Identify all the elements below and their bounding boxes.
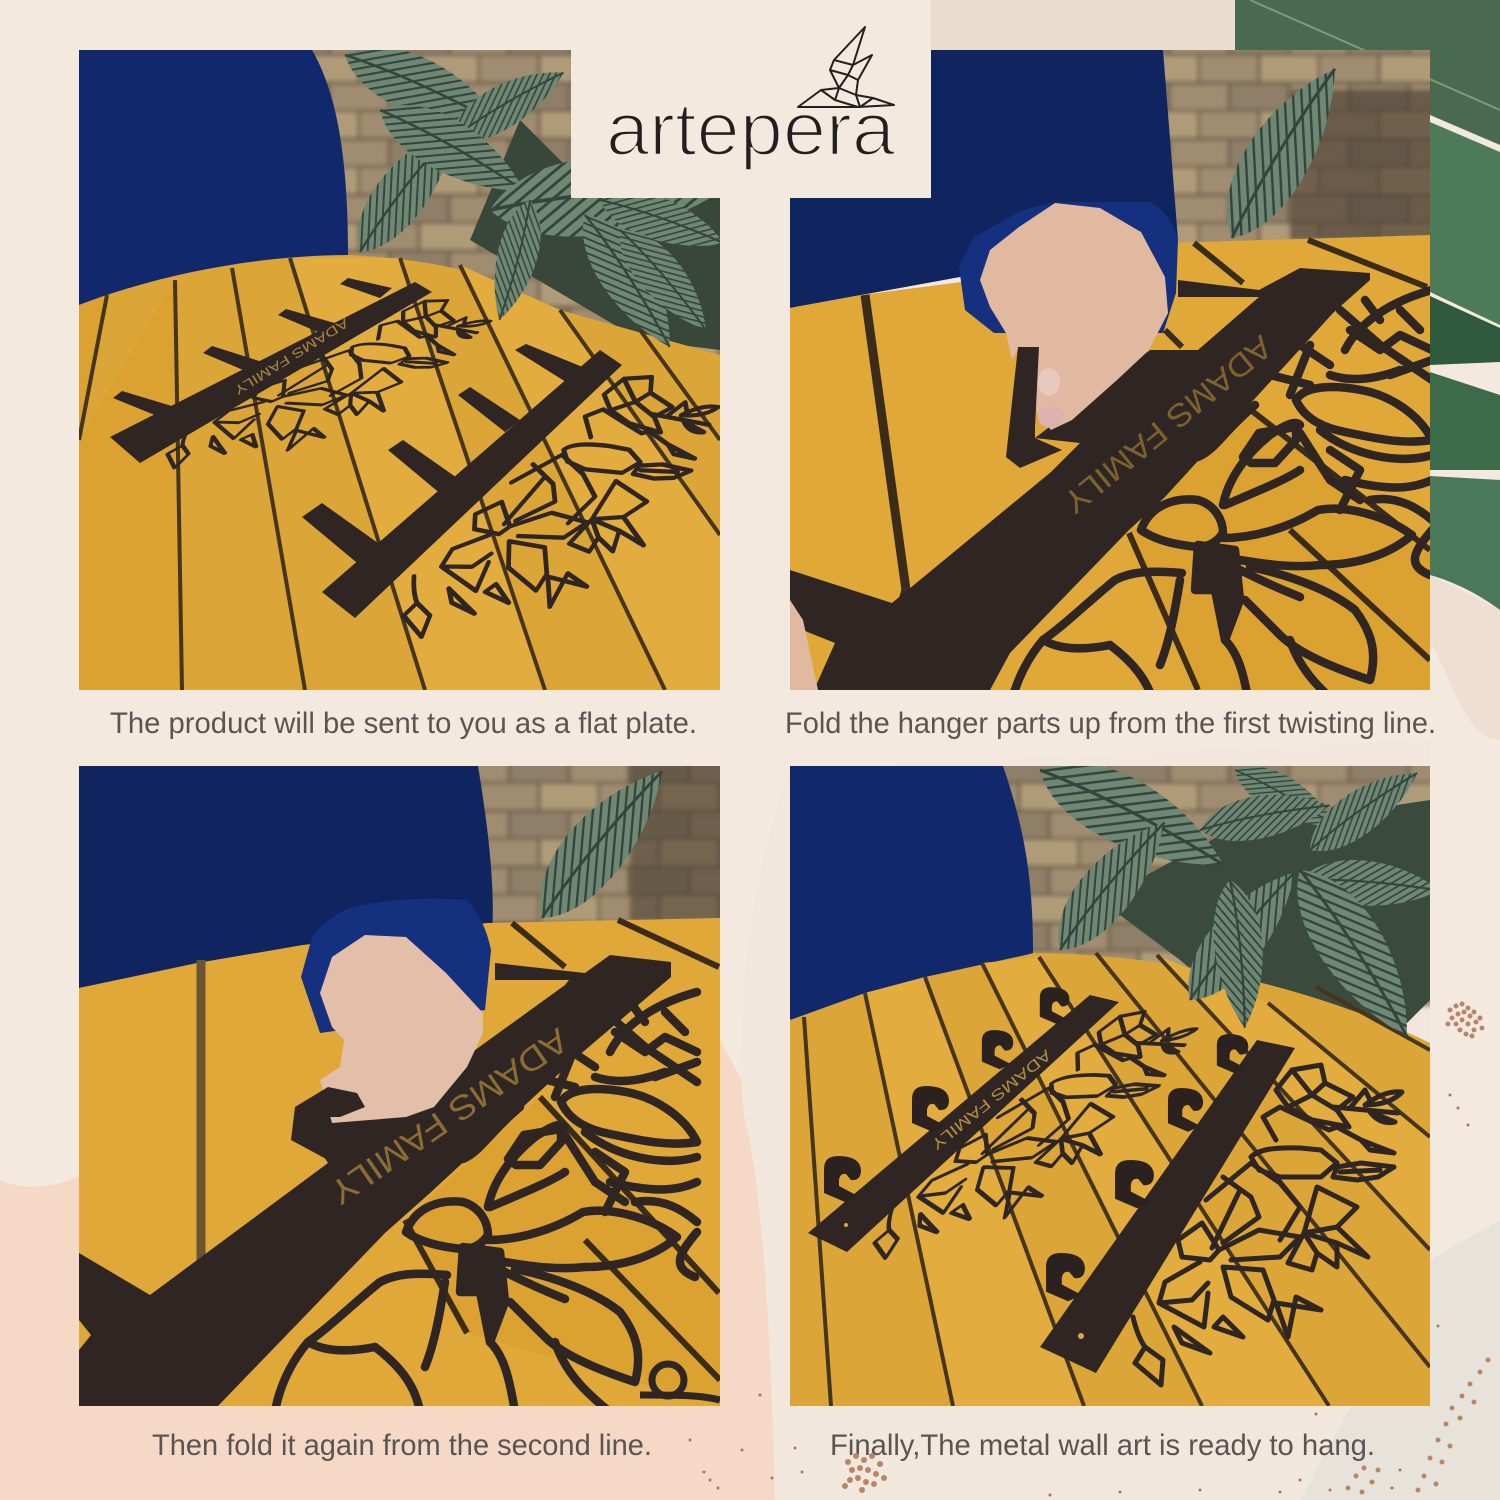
brick wall <box>1003 766 1430 1010</box>
fern overhanging table <box>494 200 706 348</box>
table <box>79 918 720 1406</box>
table <box>790 235 1430 690</box>
metal strip with hangers <box>790 268 1370 690</box>
sweater <box>790 766 1033 1020</box>
metal strip with hangers <box>79 955 671 1406</box>
sweater <box>790 50 1178 308</box>
sweater cuff <box>959 202 1178 333</box>
second hand at edge <box>790 600 818 690</box>
panel 2: first fold <box>790 50 1430 690</box>
strip label: ADAMS FAMILY <box>322 1020 575 1212</box>
hand <box>320 935 483 1123</box>
metal strip 2 with hangers <box>302 344 622 618</box>
flower cut-outs strip 2 <box>1133 1065 1402 1385</box>
logo box <box>571 0 931 198</box>
table <box>79 255 720 690</box>
caption 2: Fold the hanger parts up from the first twisting line. <box>785 707 1436 740</box>
decorative leaves top right <box>1235 0 1500 610</box>
folded hanger tab <box>291 1087 365 1160</box>
caption 1: The product will be sent to you as a flat plate. <box>110 707 697 740</box>
brick wall <box>1163 50 1430 243</box>
flower cut-outs strip 1 <box>165 299 493 470</box>
strip 1 label: ADAMS FAMILY <box>231 315 351 398</box>
sweater cuff <box>301 899 491 1033</box>
flower cut-outs <box>275 992 720 1412</box>
brick wall <box>312 50 720 355</box>
gold glitter <box>690 1004 1488 1495</box>
sweater <box>79 50 348 305</box>
folded hanger tab <box>1006 347 1062 468</box>
hand <box>980 203 1168 430</box>
metal strip 1 with hooks <box>808 987 1119 1252</box>
panel 4: finished <box>770 737 1450 1406</box>
fern backing <box>1100 800 1430 1030</box>
fern <box>344 50 720 350</box>
metal strip 1 with hangers <box>110 278 432 463</box>
metal strip 2 with hooks <box>1040 1034 1295 1373</box>
strip 1 label: ADAMS FAMILY <box>928 1046 1054 1153</box>
flower cut-outs <box>1010 290 1432 710</box>
panel 1: flat plate <box>60 27 740 690</box>
fern <box>1227 68 1336 239</box>
flower cut-outs strip 1 <box>864 1009 1208 1259</box>
panel 3: second fold <box>60 746 740 1412</box>
fern <box>540 770 664 919</box>
wordmark: artepera <box>606 87 895 171</box>
icon: origami bird <box>798 27 894 107</box>
strip label: ADAMS FAMILY <box>1056 329 1279 521</box>
flower cut-outs strip 2 <box>401 374 720 639</box>
sweater <box>79 766 493 988</box>
caption 3: Then fold it again from the second line. <box>152 1429 652 1462</box>
caption 4: Finally,The metal wall art is ready to hang. <box>830 1429 1375 1462</box>
table <box>790 953 1430 1406</box>
brick wall <box>478 766 720 923</box>
fern <box>1040 766 1430 1038</box>
